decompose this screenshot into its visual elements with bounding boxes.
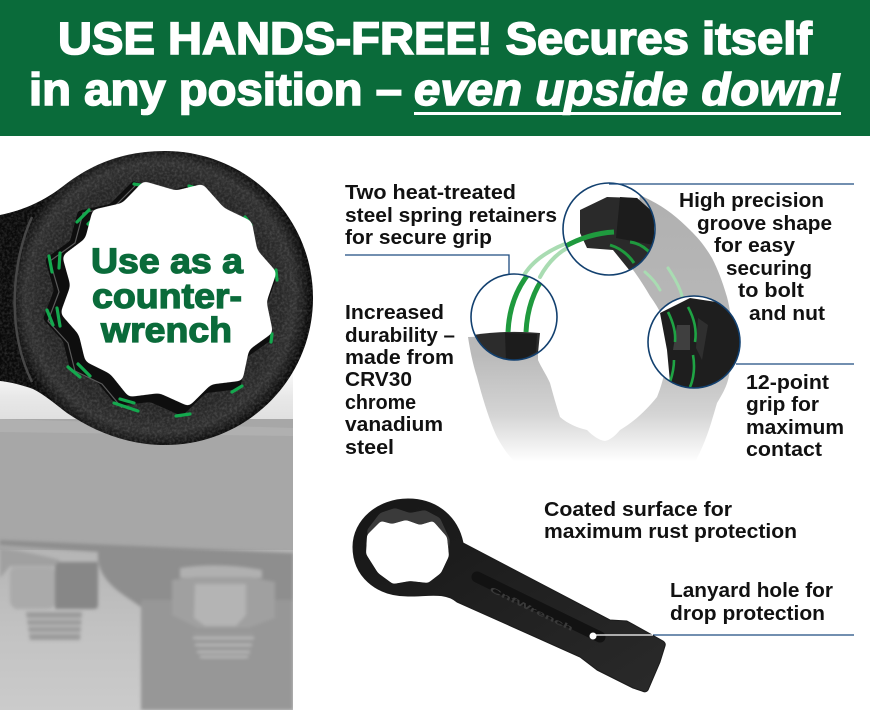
header banner: [0, 0, 870, 136]
callout: durability: steel: [345, 437, 394, 459]
callout: durability: CRV30: [345, 369, 412, 391]
callout: groove shape: [679, 190, 832, 325]
handle shoulder highlight: [15, 217, 32, 382]
title emphasis: even upside down!: [414, 64, 841, 115]
callout leader lines: [345, 184, 854, 635]
faded springs: [523, 241, 682, 296]
callout: groove shape: for easy: [714, 235, 796, 257]
detail circle: spring retainers: [476, 276, 542, 360]
callout: durability: chrome: [345, 392, 416, 414]
handle slot: [477, 577, 600, 637]
background photo: bolts on steel beam: [0, 365, 293, 710]
callout: durability: durability –: [345, 325, 455, 347]
callout: lanyard hole: [670, 580, 833, 625]
callout: rust protection: maximum rust protection: [544, 521, 797, 543]
callout: spring retainers: steel spring retainers: [345, 205, 557, 227]
callout: groove shape: to bolt: [738, 280, 804, 302]
large wrench ring close-up: [0, 151, 313, 445]
counter-wrench label: counter-: [92, 277, 242, 316]
counter-wrench label: Use as a: [91, 242, 244, 281]
wall highlight: [48, 183, 138, 408]
callout: 12-point grip: grip for: [746, 394, 819, 416]
callout: durability: [345, 302, 455, 459]
callout: groove shape: High precision: [679, 190, 824, 212]
callout: durability: vanadium: [345, 414, 443, 436]
hole opening: [60, 181, 277, 407]
detail circle: groove: [566, 196, 654, 270]
wrench ring opening: [366, 520, 449, 584]
callout: groove shape: groove shape: [697, 213, 832, 235]
white leader: [596, 634, 653, 636]
engraved marking: CnfWrench: [488, 585, 576, 634]
callout: durability: made from: [345, 347, 454, 369]
callout: 12-point grip: contact: [746, 439, 822, 461]
title line 2: in any position –: [29, 64, 402, 115]
cut-away ring diagram: [468, 182, 740, 462]
counter-wrench label: wrench: [100, 311, 232, 350]
callout: spring retainers: [345, 182, 557, 249]
inner wall of the hole: [43, 181, 277, 416]
inner wall teeth: [367, 508, 450, 555]
green retainer springs: [47, 184, 277, 416]
callout: 12-point grip: 12-point: [746, 372, 829, 394]
callout: rust protection: Coated surface for: [544, 499, 732, 521]
callout: durability: Increased: [345, 302, 444, 324]
callout: lanyard hole: Lanyard hole for: [670, 580, 833, 602]
callout: 12-point grip: maximum: [746, 417, 844, 439]
counter-wrench label: [91, 242, 244, 350]
callout: spring retainers: for secure grip: [345, 227, 492, 249]
full slogging wrench photo: [353, 499, 665, 692]
detail circle: 12-point grip: [660, 296, 740, 388]
callout: lanyard hole: drop protection: [670, 603, 825, 625]
detail circle outlines: [471, 183, 740, 388]
wrench body: [353, 499, 665, 692]
callout: spring retainers: Two heat-treated: [345, 182, 516, 204]
callout: rust protection: [544, 499, 797, 543]
callout: groove shape: and nut: [749, 303, 825, 325]
ring and handle: [0, 151, 313, 445]
lanyard hole: [590, 632, 596, 640]
faded ring body: [468, 195, 732, 462]
callout: groove shape: securing: [726, 258, 812, 280]
callout: 12-point grip: [746, 372, 844, 461]
title line 1: USE HANDS-FREE! Secures itself: [58, 13, 813, 64]
